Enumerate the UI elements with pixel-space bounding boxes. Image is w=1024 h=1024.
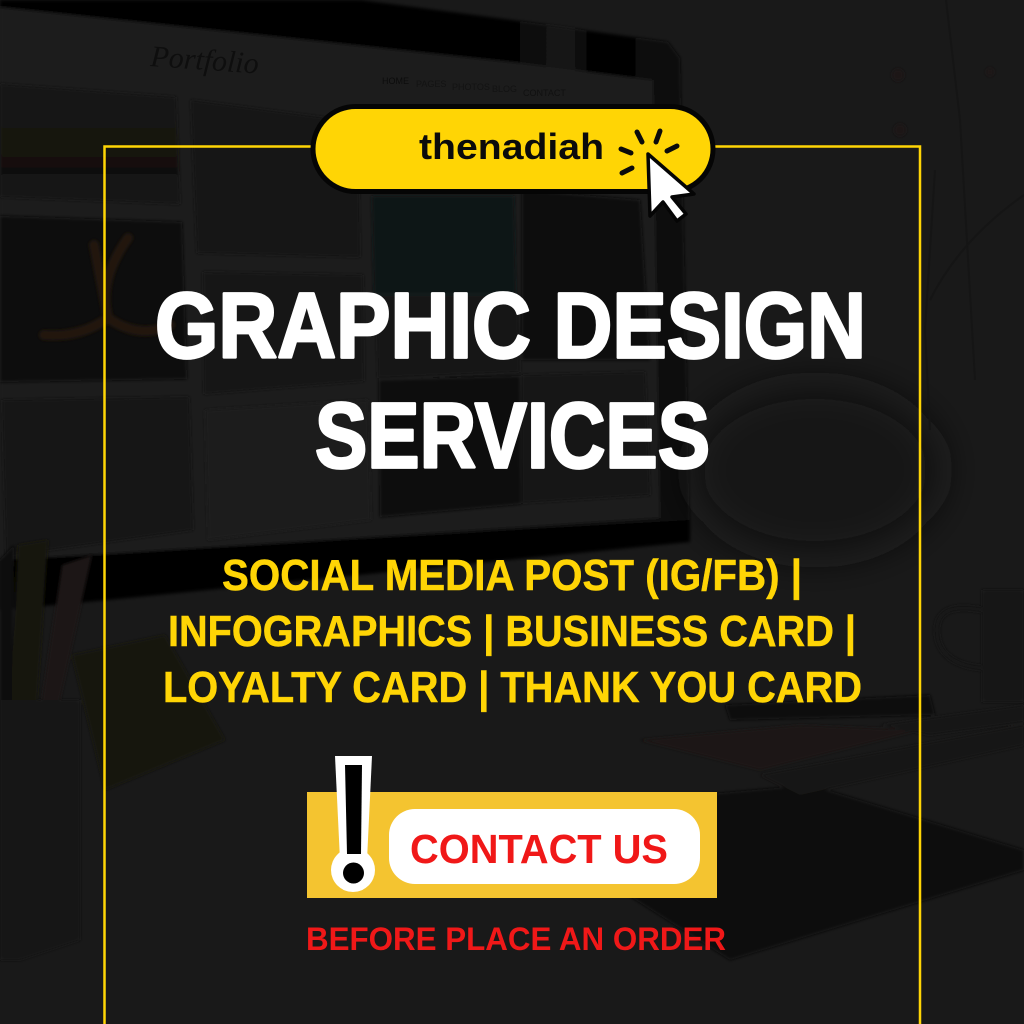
contact text: CONTACT US xyxy=(410,826,668,872)
contact banner xyxy=(307,756,717,898)
pill shape xyxy=(313,106,713,192)
background: desk papers and tablet xyxy=(620,695,1024,960)
contact button xyxy=(389,809,700,884)
services line 2: INFOGRAPHICS | BUSINESS CARD | xyxy=(168,607,856,657)
background: portfolio logo and menu: CONTACT xyxy=(523,88,566,98)
background: portfolio logo and menu: PHOTOS xyxy=(452,82,490,92)
brand name: thenadiah xyxy=(419,126,604,167)
background: portfolio logo and menu: PAGES xyxy=(416,79,446,89)
banner background xyxy=(307,792,717,898)
icon: exclamation mark xyxy=(331,756,375,892)
background: portfolio logo and menu xyxy=(149,40,566,98)
background: monitor bezel xyxy=(0,0,690,610)
background: plant bush xyxy=(690,385,940,555)
background: plant stems xyxy=(925,0,1024,430)
icon: click rays xyxy=(621,131,677,173)
yellow frame border xyxy=(104,146,920,1024)
background: portfolio logo and menu: HOME xyxy=(382,76,409,86)
services list xyxy=(163,551,862,713)
background: portfolio logo and menu: BLOG xyxy=(492,84,517,94)
background: coffee mug xyxy=(937,590,1024,702)
background: starfish in photo xyxy=(44,238,170,335)
title line 1: GRAPHIC DESIGN xyxy=(155,274,866,378)
order note: BEFORE PLACE AN ORDER xyxy=(306,921,726,957)
background: portfolio photo grid xyxy=(0,84,650,556)
services line 1: SOCIAL MEDIA POST (IG/FB) | xyxy=(222,551,802,601)
title line 2: SERVICES xyxy=(315,384,710,488)
brand pill xyxy=(313,106,713,221)
background: portfolio logo and menu: Portfolio xyxy=(149,40,260,81)
icon: mouse cursor xyxy=(648,154,694,221)
background: flower buds xyxy=(892,68,994,136)
services line 3: LOYALTY CARD | THANK YOU CARD xyxy=(163,663,862,713)
title xyxy=(155,274,866,488)
background: pencils in a jar xyxy=(0,540,225,960)
